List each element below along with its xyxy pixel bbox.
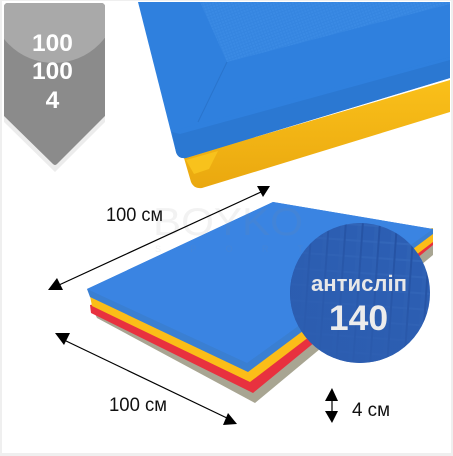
height arrow xyxy=(325,388,338,423)
watermark: BOYKO xyxy=(153,201,303,244)
grey layer xyxy=(92,243,433,403)
stacked mats xyxy=(87,202,433,403)
badge values xyxy=(32,30,73,114)
height label: 4 см xyxy=(352,400,390,421)
blue layer xyxy=(138,2,450,158)
blue layer xyxy=(87,202,433,372)
anti-slip circle xyxy=(290,223,430,363)
width label: 100 см xyxy=(106,205,163,226)
length label: 100 см xyxy=(109,395,167,416)
red layer xyxy=(90,236,433,393)
yellow layer xyxy=(90,228,433,382)
watermark: SPORT xyxy=(155,244,304,254)
badge values: 100 xyxy=(32,30,73,57)
width arrow xyxy=(48,186,270,290)
badge values: 100 xyxy=(32,58,73,85)
length arrow xyxy=(55,333,237,425)
badge values: 4 xyxy=(46,87,60,114)
close-up mat corner xyxy=(138,2,450,188)
circle value: 140 xyxy=(329,298,388,338)
yellow layer xyxy=(184,80,450,188)
size badge xyxy=(4,3,105,172)
circle label: антисліп xyxy=(311,271,407,296)
